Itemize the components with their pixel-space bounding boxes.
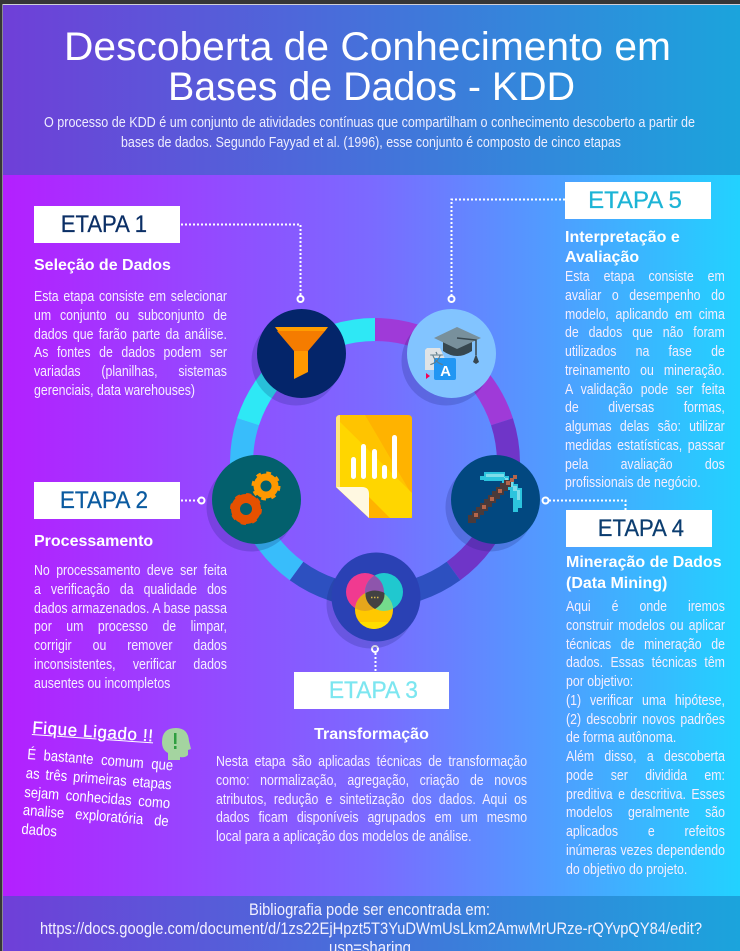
icon: funnel [252, 309, 346, 406]
icon: central document chart [336, 415, 412, 518]
panel: etapa 4: preditiva e descritiva. Esses [566, 786, 725, 802]
intro text [44, 114, 695, 151]
icon: graduation cap and translation: A [440, 363, 451, 380]
panel: etapa 5: utilizados na fase de [565, 344, 725, 360]
panel: etapa 4: técnicas de mineração de [566, 636, 725, 652]
panel: etapa 2: dados armazenados. A base passa [34, 600, 227, 616]
panel: etapa 3: Nesta etapa são aplicadas técnicas de transformação [216, 754, 527, 770]
callout text: analise exploratória de [22, 802, 169, 830]
icon: graduation cap and translation: 文 [430, 349, 444, 369]
panel: etapa 1: um conjunto ou subconjunto de [34, 308, 227, 324]
panel: etapa 3: ETAPA 3 [328, 677, 418, 704]
panel: etapa 4: (Data Mining) [566, 575, 667, 592]
panel: etapa 5: profissionais de negócio. [565, 475, 701, 491]
panel: etapa 5: modelo, aplicando em cima [565, 306, 725, 322]
callout heading: Fique Ligado !! [32, 718, 154, 745]
panel: etapa 5: algumas delas são: utilizar [565, 419, 725, 435]
panel: etapa 1: As fontes de dados podem ser [34, 345, 227, 361]
callout text: É bastante comum que [27, 746, 174, 774]
title: Descoberta de Conhecimento em [64, 25, 671, 69]
panel: etapa 3: local para a aplicação dos modelos de análise. [216, 829, 472, 845]
panel: etapa 2: por um processo de limpar, [34, 619, 227, 635]
icon: venn diagram [326, 552, 420, 648]
footer: bibliography: Bibliografia pode ser encontrada em: [249, 900, 490, 919]
panel: etapa 1: ETAPA 1 [61, 211, 147, 238]
panel: etapa 4: modelos geralmente são [566, 805, 725, 821]
panel: etapa 2: inconsistentes, verificar dados [34, 657, 227, 673]
panel: etapa 4: aplicados e refeitos [566, 824, 725, 840]
panel: etapa 1: variadas (planilhas, sistemas [34, 364, 227, 380]
panel: etapa 4: inúmeras vezes dependendo [566, 843, 725, 859]
panel: etapa 5: treinamento ou mineração. [565, 363, 725, 379]
ring diagram [206, 309, 540, 648]
panel: footer band [3, 896, 740, 951]
panel: main gradient [3, 175, 740, 896]
panel: etapa 4 [566, 510, 725, 878]
panel: etapa 4: por objetivo: [566, 674, 633, 690]
panel: etapa 4: de forma autônoma. [566, 730, 676, 746]
panel: etapa 4: Aqui é onde iremos [566, 599, 725, 615]
panel: etapa 2: Processamento [34, 533, 153, 550]
panel: etapa 4: Além disso, a descoberta [566, 749, 725, 765]
panel: etapa 1: gerenciais, data warehouses) [34, 383, 195, 399]
panel: etapa 2: ausentes ou incompletos [34, 676, 170, 692]
panel: etapa 1: dados que farão parte da análise. [34, 326, 227, 342]
panel: etapa 2 [34, 482, 227, 692]
ring segments [241, 330, 509, 596]
callout text: dados [21, 821, 58, 841]
panel: etapa 5: avaliar o desempenho do [565, 288, 725, 304]
panel: etapa 5: de diversas formas, [565, 400, 725, 416]
panel: etapa 3: como: normalização, agregação, criação de novos [216, 773, 527, 789]
panel: etapa 4: Mineração de Dados [566, 554, 722, 571]
panel: header band [3, 5, 740, 175]
panel: etapa 4: (1) verificar uma hipótese, [566, 693, 725, 709]
panel: etapa 4: ETAPA 4 [598, 515, 684, 542]
panel: etapa 5: ETAPA 5 [588, 187, 682, 214]
panel: etapa 4: (2) descobrir novos padrões [566, 712, 725, 728]
callout text: as três primeiras etapas [25, 765, 172, 793]
panel: etapa 3: Transformação [314, 726, 429, 743]
panel: etapa 3: atributos, redução e sintetização dos dados. Aqui os [216, 792, 527, 808]
callout: fique ligado [21, 718, 191, 841]
panel: etapa 2: No processamento deve ser feita [34, 563, 227, 579]
panel: etapa 5: A validação pode ser feita [565, 382, 725, 398]
panel: etapa 1 [34, 206, 227, 399]
panel: etapa 3: dados ficam disponíveis agrupados em um mesmo [216, 810, 527, 826]
callout text: sejam conhecidas como [24, 783, 171, 812]
panel: etapa 5: de dados que não foram [565, 325, 725, 341]
icon: head with exclamation [162, 728, 191, 760]
panel: etapa 4: pode ser dividida em: [566, 768, 725, 784]
title [64, 25, 671, 109]
panel: etapa 4: construir modelos ou aplicar [566, 618, 725, 634]
callout text [21, 746, 174, 841]
icon: pickaxe [446, 455, 540, 552]
panel: etapa 2: a verificação da qualidade dos [34, 582, 227, 598]
panel: etapa 5: medidas estatísticas, passar [565, 438, 725, 454]
panel: etapa 1: Seleção de Dados [34, 257, 171, 274]
panel: etapa 2: ETAPA 2 [60, 487, 148, 514]
title: Bases de Dados - KDD [168, 65, 575, 109]
panel: etapa 5 [565, 182, 725, 491]
panel: etapa 3 [216, 672, 527, 845]
panel: etapa 2: corrigir ou remover dados [34, 638, 227, 654]
panel: etapa 4: do objetivo do projeto. [566, 862, 687, 878]
panel: etapa 4: dados. Essas técnicas têm [566, 655, 725, 671]
icon: graduation cap and translation [402, 309, 496, 406]
icon: gears [206, 455, 301, 552]
panel: etapa 5: pela avaliação dos [565, 456, 725, 472]
panel: etapa 5: Interpretação e [565, 229, 680, 246]
intro text: bases de dados. Segundo Fayyad et al. (1996), esse conjunto é composto de cinco etapas [121, 134, 621, 151]
panel: etapa 1: Esta etapa consiste em selecionar [34, 289, 227, 305]
panel: etapa 5: Esta etapa consiste em [565, 269, 725, 285]
panel: etapa 5: Avaliação [565, 249, 639, 266]
